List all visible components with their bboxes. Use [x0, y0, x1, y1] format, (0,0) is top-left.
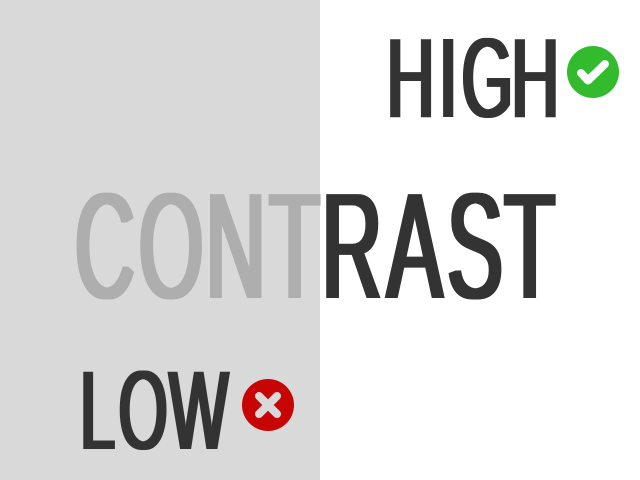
title: CONTRAST: CONTRAST: [75, 162, 555, 330]
heading: LOW: LOW: [80, 349, 229, 474]
panel: low contrast grey half: [0, 0, 320, 480]
icon: red cross: [242, 379, 294, 431]
heading: HIGH: HIGH: [387, 14, 559, 141]
icon: green check: [567, 46, 619, 98]
